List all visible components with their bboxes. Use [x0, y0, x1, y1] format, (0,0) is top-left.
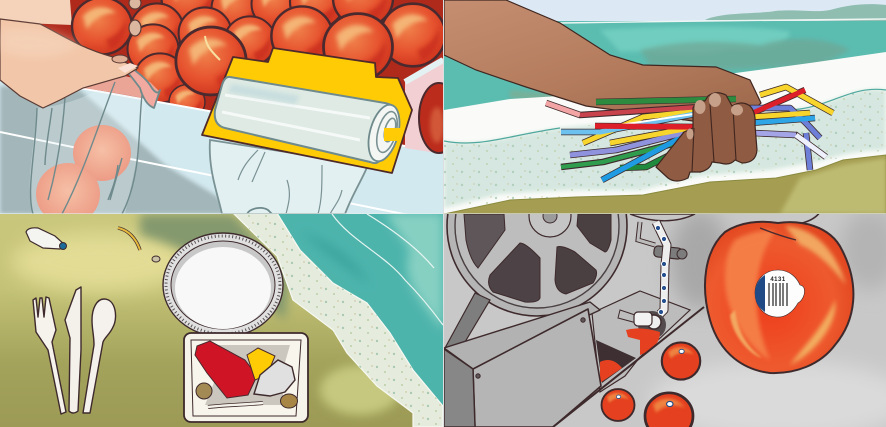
apple yellow streak	[790, 300, 835, 365]
apple in right bin	[418, 82, 443, 154]
barcode	[769, 283, 787, 306]
panel: plastic produce bags at the apple bin	[0, 0, 459, 225]
paper plate	[163, 233, 283, 337]
plastic fork	[33, 297, 66, 414]
apple stem and highlight	[205, 36, 220, 60]
apple stem dimple	[760, 228, 796, 240]
sand	[444, 155, 886, 214]
red wrapper	[195, 341, 257, 398]
apple slipping out	[600, 360, 622, 383]
straws held in hand	[546, 87, 833, 180]
chute interior	[592, 291, 690, 392]
apple on conveyor top	[662, 342, 700, 380]
panel: plastic straws on a beach	[444, 0, 886, 214]
apple streaks	[785, 226, 846, 285]
plastic knife	[65, 287, 81, 413]
sea	[277, 213, 443, 406]
grey backdrop	[444, 214, 886, 427]
apple streaks left	[725, 230, 775, 360]
chute edge	[553, 307, 704, 427]
machine strut	[445, 293, 490, 348]
bin shadow patch	[0, 86, 235, 214]
plastic spoon	[83, 299, 116, 413]
dark cavity	[596, 340, 636, 383]
upper reel fragment	[630, 214, 695, 221]
foam band	[233, 213, 443, 427]
panel: sticker machine and apples	[444, 136, 886, 427]
french fry	[118, 228, 140, 250]
sea	[444, 21, 886, 110]
machine housing	[444, 302, 601, 427]
yellow bag dispenser	[202, 48, 412, 173]
crushed plastic bottle	[26, 228, 66, 250]
shopper hand	[0, 0, 141, 108]
arm and back of hand	[444, 0, 761, 122]
food tray	[184, 333, 308, 422]
distant hills	[705, 4, 886, 21]
sticker chain	[655, 222, 667, 315]
horizon line	[560, 19, 886, 23]
sand lighter patch	[780, 158, 886, 214]
sticker arm	[638, 222, 687, 259]
stamper head	[618, 310, 661, 329]
foam	[444, 52, 886, 214]
wet sand wash	[444, 89, 886, 208]
film reel	[447, 136, 627, 316]
sky	[508, 0, 886, 21]
crumpled napkin	[254, 360, 295, 396]
yellow food	[247, 348, 275, 380]
apple under stamper	[626, 328, 660, 355]
hanging bag with peaches	[30, 70, 161, 214]
mechanism wheel	[638, 311, 666, 339]
lighter backdrop wash	[650, 210, 886, 427]
plastic bag on roll	[210, 140, 368, 214]
sea patches and wave lines	[314, 214, 443, 328]
apple yellow streak left	[730, 310, 762, 358]
food scraps	[196, 383, 212, 399]
roll end spiral	[368, 104, 400, 162]
light patches of ground	[10, 214, 400, 415]
apple on conveyor lower left	[602, 389, 634, 421]
rim	[405, 60, 443, 82]
apple on conveyor lower right	[645, 393, 693, 427]
fingers and thumb	[656, 93, 757, 181]
sticker number: 4131	[770, 277, 786, 283]
panel: picnic trash on the shore	[0, 213, 443, 427]
pebble	[152, 256, 160, 262]
right bin wall	[405, 58, 443, 154]
bin front panel	[0, 80, 443, 214]
price sticker	[755, 270, 804, 317]
foam speckles	[233, 213, 443, 427]
bin white rim lines	[0, 88, 407, 214]
apples in the bin	[128, 0, 445, 119]
bag roll	[215, 77, 398, 163]
ground	[0, 214, 443, 427]
sea patches	[510, 26, 850, 104]
big stickered apple	[705, 222, 853, 373]
french fry fill	[118, 228, 140, 250]
